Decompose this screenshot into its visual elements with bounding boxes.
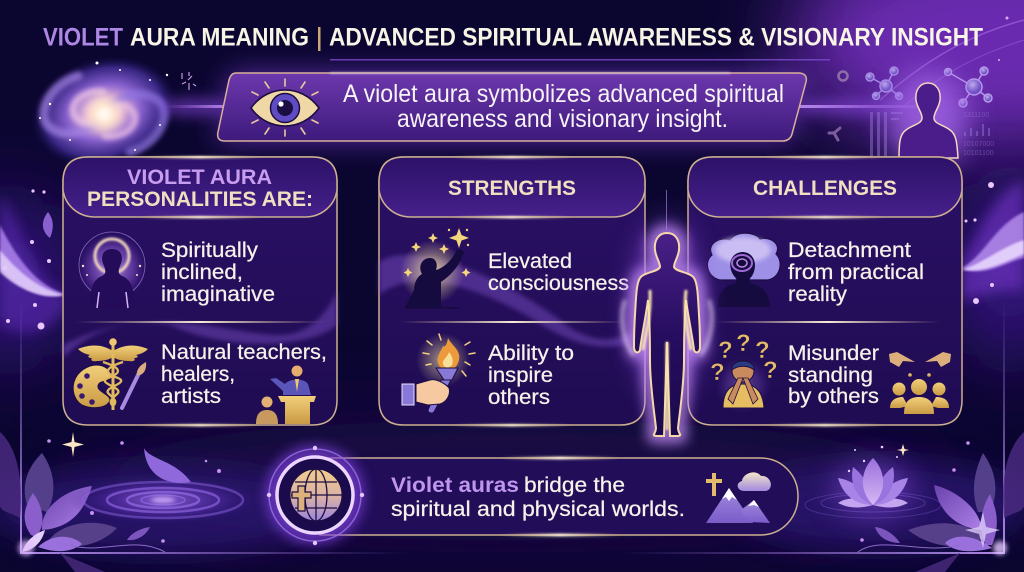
person glow xyxy=(888,72,968,168)
text: ability: others xyxy=(488,386,550,409)
lotus with ripples xyxy=(805,444,941,518)
data columns: 1311100 xyxy=(963,112,989,119)
title: AURA MEANING xyxy=(130,24,309,52)
text: elevated: Elevated xyxy=(488,250,572,273)
text: spiritually inclined: inclined, xyxy=(161,261,243,284)
data columns: 10107000 xyxy=(963,141,994,148)
text: natural teachers: Natural teachers, xyxy=(161,341,327,364)
corner leaves: left xyxy=(0,432,165,572)
data columns xyxy=(870,112,994,157)
header: CHALLENGES xyxy=(753,177,897,200)
icon: confused person: ? xyxy=(763,357,778,384)
header: VIOLET AURA xyxy=(127,166,272,189)
panel: challenges xyxy=(688,156,962,426)
icon: caduceus and palette xyxy=(73,338,148,410)
galaxy xyxy=(19,41,196,183)
banner text: A violet aura symbolizes advanced spiritual xyxy=(343,80,784,108)
decorative molecule: small ring and link xyxy=(829,72,848,140)
text: detachment: reality xyxy=(788,283,848,306)
icon: halo person xyxy=(78,232,146,308)
wave: right flowing light xyxy=(962,180,1024,300)
pill text: bridge the xyxy=(524,473,625,497)
central aura figure xyxy=(622,190,712,436)
text: misunderstanding xyxy=(788,342,879,408)
text: elevated: consciousness xyxy=(488,272,629,295)
text: detachment: Detachment xyxy=(788,239,911,262)
header xyxy=(63,157,337,217)
header: STRENGTHS xyxy=(448,177,576,200)
molecule left xyxy=(866,67,902,100)
text: detachment: from practical xyxy=(788,261,924,284)
panel glints xyxy=(765,156,885,426)
text: natural teachers: healers, xyxy=(161,363,235,386)
panel glints xyxy=(140,156,260,426)
molecule right xyxy=(944,67,992,107)
bottom pill xyxy=(265,445,798,545)
text: spiritually inclined xyxy=(161,239,275,306)
text: ability: Ability to xyxy=(488,342,574,365)
text: natural teachers: artists xyxy=(161,385,221,408)
panel glints xyxy=(452,156,572,426)
text: misunderstanding: by others xyxy=(788,385,879,408)
icon: confused person: ? xyxy=(755,337,770,364)
icon: confused person: ? xyxy=(710,359,725,386)
panel: strengths xyxy=(379,156,645,426)
panel wave xyxy=(379,255,645,347)
right silhouette with molecules and data xyxy=(866,67,994,168)
banner text xyxy=(343,80,784,133)
icon: torch xyxy=(402,333,475,413)
frame lines xyxy=(20,300,1005,554)
decorative particles xyxy=(2,182,994,330)
header xyxy=(688,157,962,217)
pill text: spiritual and physical worlds. xyxy=(391,497,685,521)
divider xyxy=(75,321,325,323)
corner leaves: right xyxy=(858,432,1024,572)
text: spiritually inclined: Spiritually xyxy=(161,239,259,262)
pill text: Violet auras xyxy=(391,473,519,497)
icon: globe ring xyxy=(265,445,365,545)
header xyxy=(379,157,645,217)
icon: cross, cloud and mountains xyxy=(706,472,771,523)
banner text: awareness and visionary insight. xyxy=(397,105,728,133)
divider xyxy=(715,321,940,323)
text: detachment xyxy=(788,239,924,306)
text: spiritually inclined: imaginative xyxy=(161,283,275,306)
header: PERSONALITIES ARE: xyxy=(87,188,313,211)
icon: confused person: ? xyxy=(718,337,733,364)
title xyxy=(43,24,983,52)
pill text xyxy=(391,473,685,521)
icon: eye xyxy=(251,79,319,136)
text: misunderstanding: standing xyxy=(788,364,873,387)
text: ability xyxy=(488,342,574,409)
divider xyxy=(400,321,625,323)
icon: confused person xyxy=(710,330,778,413)
icon: teacher at podium xyxy=(256,366,316,424)
panel wave xyxy=(63,290,337,358)
text: natural teachers xyxy=(161,341,327,408)
text: elevated xyxy=(488,250,629,295)
panel: personalities xyxy=(63,156,337,426)
title: VIOLET xyxy=(43,24,123,52)
ripple and falling leaf xyxy=(47,432,258,543)
wave: left flowing light xyxy=(0,195,70,332)
text: ability: inspire xyxy=(488,364,553,387)
text: misunderstanding: Misunder xyxy=(788,342,879,365)
data columns: 10101100 xyxy=(963,150,994,157)
top banner xyxy=(218,72,806,141)
icon: confused person: ? xyxy=(736,330,751,357)
icon: head in clouds xyxy=(707,233,780,307)
icon: pointing hands and group xyxy=(889,352,951,414)
icon: reaching person with stars xyxy=(400,228,470,308)
beams beside banner xyxy=(160,59,925,117)
